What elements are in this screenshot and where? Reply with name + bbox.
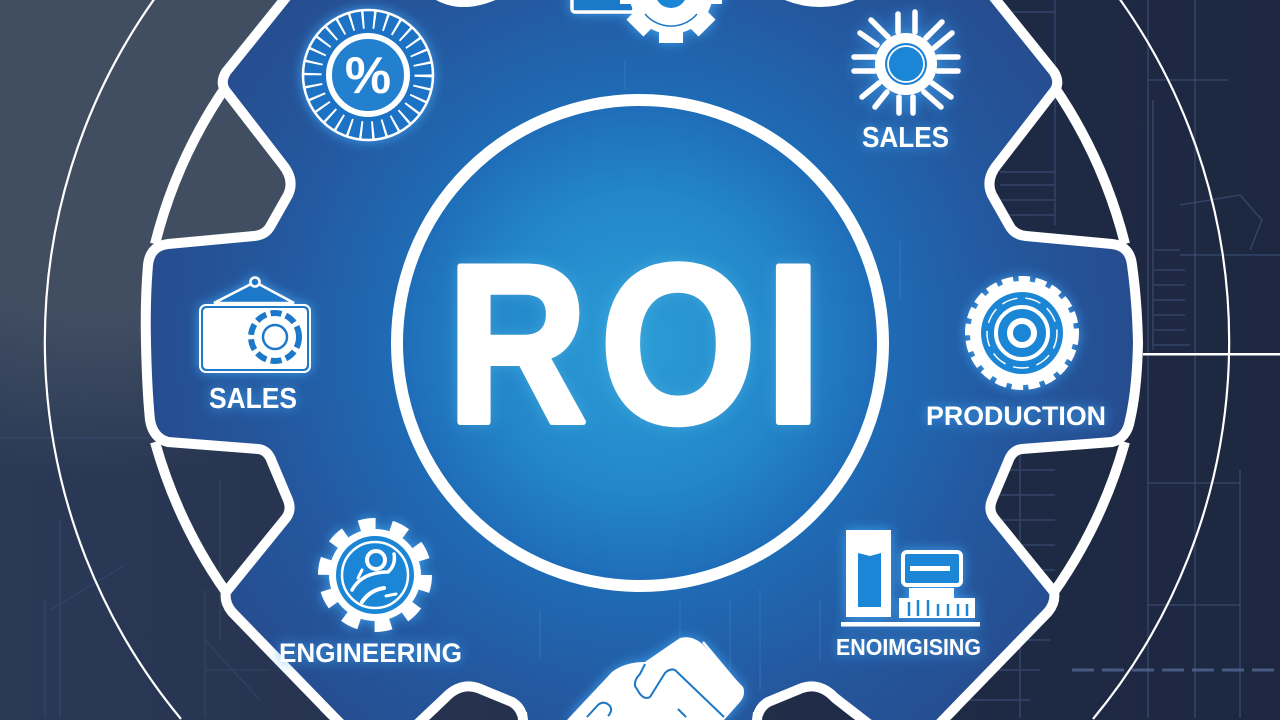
icon: percent gear: % bbox=[345, 47, 391, 105]
central circle bbox=[397, 100, 883, 586]
icon: hanging sign bbox=[200, 278, 310, 372]
icon: handshake bbox=[567, 637, 744, 720]
label: enoimgising: ENOIMGISING bbox=[836, 634, 981, 660]
icon: factory and monitor bbox=[841, 530, 980, 626]
icon: engineering gear bbox=[325, 525, 425, 625]
title: ROI: O bbox=[600, 218, 756, 471]
label: sales top right: SALES bbox=[862, 122, 949, 154]
label: production: PRODUCTION bbox=[926, 401, 1106, 431]
gear body bbox=[146, 0, 1138, 720]
icon: production gear bbox=[970, 281, 1074, 385]
icon: percent gear bbox=[303, 10, 433, 140]
title: ROI: I bbox=[765, 217, 822, 470]
icon: top gear with box bbox=[572, 0, 722, 43]
icon: sun bbox=[854, 12, 958, 113]
label: sales left: SALES bbox=[209, 383, 297, 415]
title: ROI: R bbox=[447, 217, 587, 470]
label: engineering: ENGINEERING bbox=[279, 638, 462, 668]
connector line bbox=[1143, 353, 1280, 356]
title: ROI bbox=[447, 217, 822, 471]
